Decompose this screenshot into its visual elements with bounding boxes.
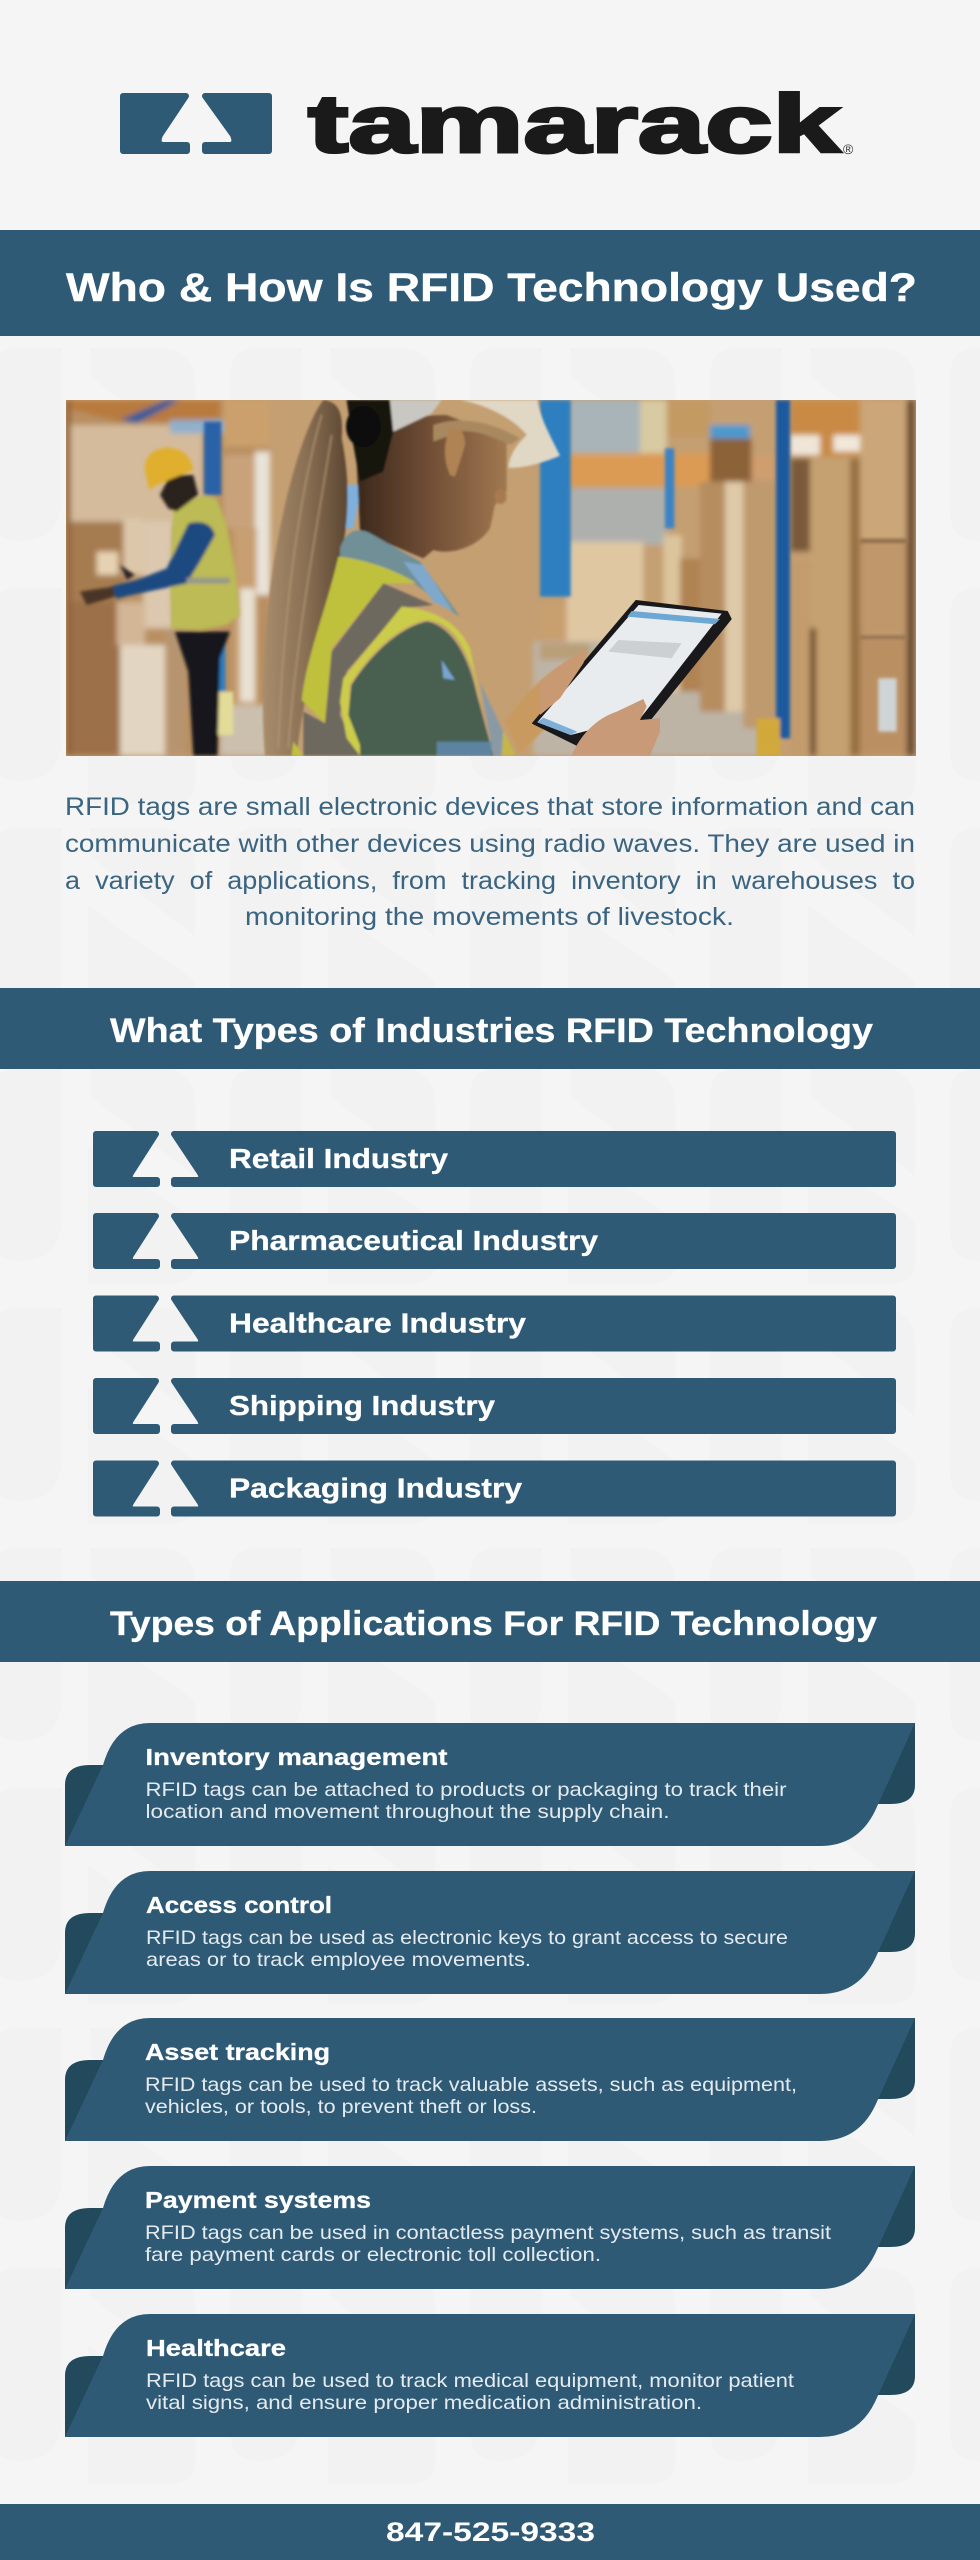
list item: healthcare [96,1298,893,1348]
wordmark: tamarack [308,79,841,170]
intro text: a variety of applications, from tracking inventory in warehouses to [65,867,915,895]
list item: shipping [96,1381,893,1431]
heading band: applications [0,1581,980,1662]
card: asset tracking: RFID tags can be used to track valuable assets, such as equipment, [145,2074,797,2096]
intro text [65,793,915,931]
heading band: main title [0,230,980,336]
card: asset tracking [65,2018,915,2141]
card: payment systems [65,2166,915,2289]
photo: warehouse worker using a tablet [66,400,920,756]
card: inventory management: location and movement throughout the supply chain. [146,1801,670,1823]
list item: shipping: Shipping Industry [229,1390,495,1421]
phone number: 847-525-9333 [386,2517,595,2547]
title: Who & How Is RFID Technology Used? [66,266,917,310]
card: access control: areas or to track employee movements. [146,1949,531,1971]
list item: packaging [96,1464,893,1514]
card: asset tracking: vehicles, or tools, to prevent theft or loss. [145,2096,537,2118]
right background: shelves and boxes [533,400,920,756]
card: access control: Access control [146,1892,332,1918]
footer band [0,2504,980,2560]
card: access control: RFID tags can be used as electronic keys to grant access to secure [146,1927,788,1949]
card: healthcare: RFID tags can be used to track medical equipment, monitor patient [146,2370,795,2392]
logo: tamarack [123,79,854,170]
card: payment systems: Payment systems [145,2187,371,2213]
card: inventory management: RFID tags can be attached to products or packaging to track their [146,1779,787,1801]
list item: pharmaceutical: Pharmaceutical Industry [229,1225,598,1256]
card: healthcare: vital signs, and ensure proper medication administration. [146,2392,702,2414]
heading: What Types of Industries RFID Technology [110,1012,873,1050]
icon: tamarack tree mark [123,96,269,151]
list item: pharmaceutical [96,1216,893,1266]
intro text: monitoring the movements of livestock. [245,903,734,931]
intro text: RFID tags are small electronic devices that store information and can [65,793,915,821]
list item: packaging: Packaging Industry [229,1472,522,1504]
panel: applications list [65,1723,915,2437]
card: inventory management [65,1723,915,1846]
list item: healthcare: Healthcare Industry [229,1308,526,1338]
left background and distant worker [66,400,270,756]
woman in hard hat and vest [263,400,560,756]
list item: retail: Retail Industry [229,1143,448,1174]
list item: retail [96,1134,893,1184]
heading band: industries [0,988,980,1069]
card: payment systems: fare payment cards or electronic toll collection. [145,2244,601,2266]
heading: Types of Applications For RFID Technology [110,1605,877,1643]
intro text: communicate with other devices using radio waves. They are used in [65,830,915,858]
tablet held in hands [533,601,731,756]
card: payment systems: RFID tags can be used in contactless payment systems, such as transit [145,2222,832,2244]
card: asset tracking: Asset tracking [145,2039,330,2065]
card: inventory management: Inventory management [146,1744,448,1770]
registered mark: ® [843,141,854,157]
panel: industries list [96,1134,893,1514]
card: access control [65,1871,915,1994]
card: healthcare: Healthcare [146,2335,286,2361]
card: healthcare [65,2314,915,2437]
